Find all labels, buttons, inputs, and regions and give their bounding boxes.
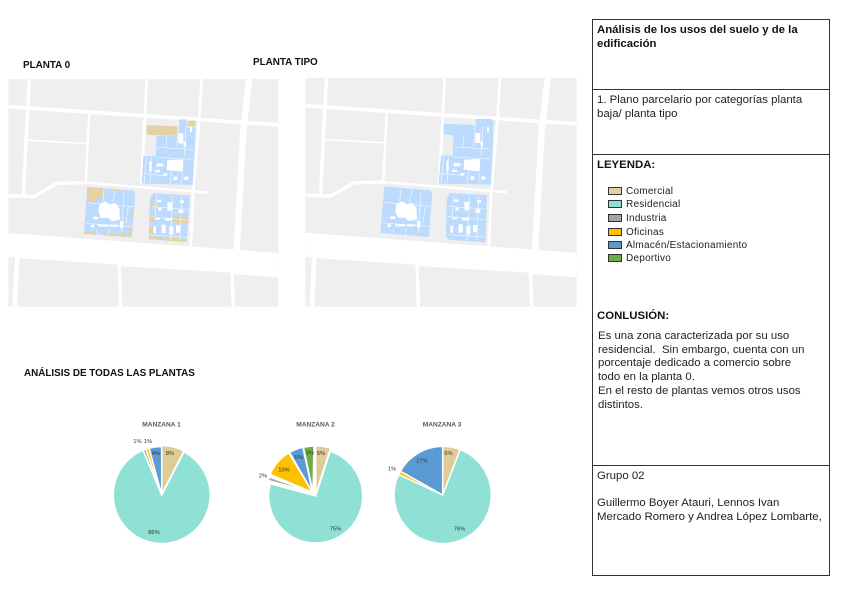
panel title: edificación [597, 38, 657, 50]
pie: manzana 3: 17% [416, 458, 428, 464]
block southeast [149, 193, 190, 242]
pie: manzana 1: 1% [144, 439, 152, 445]
base street plan [305, 78, 577, 309]
legend item: residencial: Residencial [626, 199, 680, 210]
conclusion text [598, 330, 804, 411]
conclusion heading: CONLUSIÓN: [597, 310, 669, 322]
pie: manzana 3: 1% [388, 466, 396, 472]
block north [142, 119, 196, 185]
authors [597, 497, 822, 523]
map: planta tipo [306, 78, 576, 306]
legend item: deportivo: Deportivo [626, 253, 671, 264]
pie: manzana 2 [259, 422, 363, 543]
pie: manzana 1: MANZANA 1 [142, 422, 181, 428]
pie: manzana 2: MANZANA 2 [296, 422, 335, 428]
legend heading: LEYENDA: [597, 158, 655, 170]
pie: manzana 3: MANZANA 3 [423, 422, 462, 428]
pie: manzana 3: 76% [454, 526, 465, 532]
subtitle text: baja/ planta tipo [597, 108, 677, 120]
heading: análisis de todas las plantas: ANÁLISIS DE TODAS LAS PLANTAS [24, 368, 195, 379]
subtitle text: 1. Plano parcelario por categorías planta [597, 94, 802, 106]
pie: manzana 2: 10% [278, 468, 290, 474]
subtitle text [597, 94, 802, 120]
pie: manzana 2: 3% [306, 450, 314, 456]
pie: manzana 1: 86% [148, 530, 160, 536]
pie: manzana 2: 75% [330, 526, 341, 532]
pie: manzana 3: 6% [444, 451, 453, 457]
pie: manzana 1: 4% [152, 451, 160, 457]
legend item: almacén: Almacén/Estacionamiento [626, 240, 747, 251]
conclusion text: distintos. [598, 399, 643, 411]
conclusion text: residencial. Sin embargo, cuenta con un [598, 344, 804, 356]
authors: Mercado Romero y Andrea López Lombarte, [597, 511, 822, 523]
conclusion text: porcentaje dedicado a comercio sobre [598, 357, 791, 369]
legend item: comercial: Comercial [626, 186, 673, 197]
legend item: industria: Industria [626, 213, 667, 224]
authors: Guillermo Boyer Atauri, Lennos Ivan [597, 497, 779, 509]
panel title: Análisis de los usos del suelo y de la [597, 24, 798, 36]
conclusion text: todo en la planta 0. [598, 371, 695, 383]
map: planta 0 [8, 79, 278, 306]
panel title [597, 24, 798, 50]
group label: Grupo 02 [597, 470, 644, 482]
building details [86, 122, 193, 241]
block southwest [84, 187, 135, 237]
legend [608, 186, 747, 264]
heading: planta tipo: PLANTA TIPO [253, 57, 318, 68]
conclusion text: En el resto de plantas vemos otros usos [598, 385, 801, 397]
heading: planta 0: PLANTA 0 [23, 60, 70, 71]
legend item: oficinas: Oficinas [626, 227, 664, 238]
pie: manzana 2: 2% [259, 474, 267, 480]
conclusion text: Es una zona caracterizada por su uso [598, 330, 789, 342]
pie: manzana 3 [388, 422, 491, 544]
legend item: oficinas [608, 227, 664, 238]
pie: manzana 2: 5% [317, 451, 325, 457]
pie: manzana 1: 1% [133, 439, 142, 445]
pie: manzana 1: 8% [166, 451, 174, 457]
panel: sidebar frame [592, 19, 830, 576]
pie: manzana 2: 5% [295, 455, 303, 461]
base street plan [8, 79, 278, 307]
blocks [380, 119, 494, 242]
pie: manzana 1 [113, 422, 210, 543]
legend item: industria [608, 213, 667, 224]
